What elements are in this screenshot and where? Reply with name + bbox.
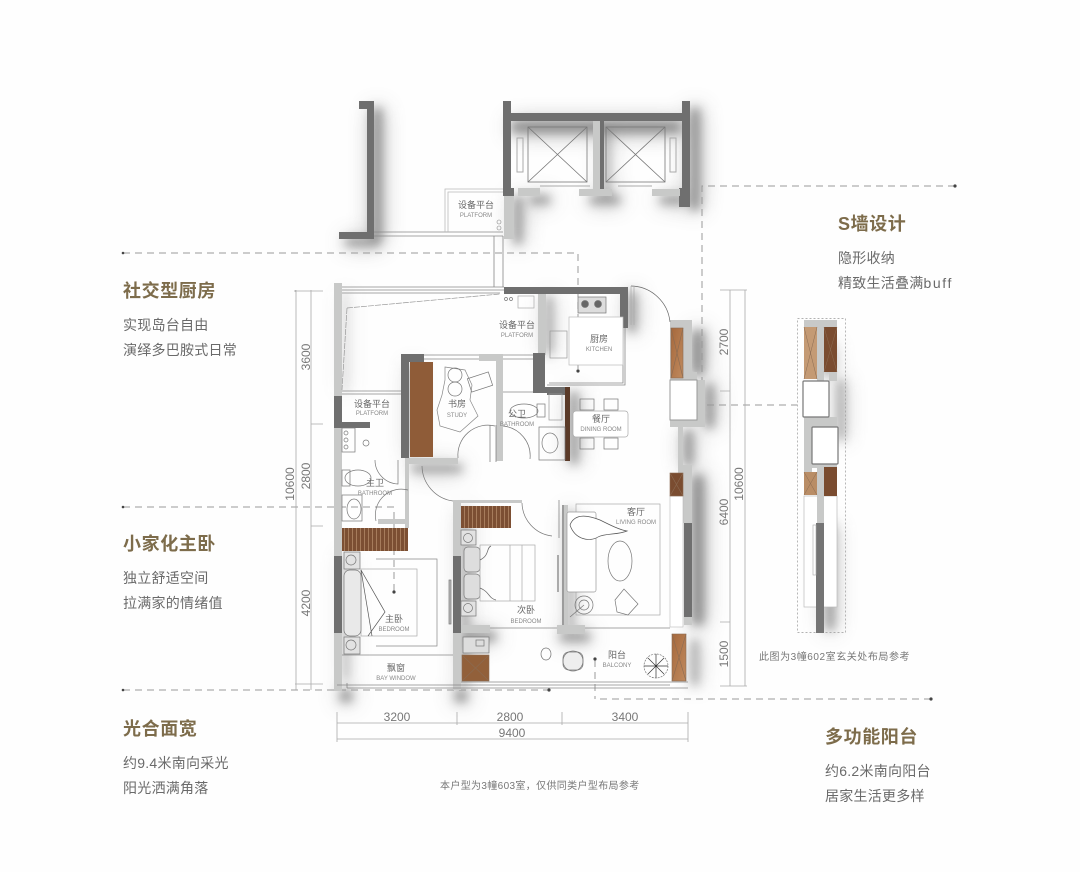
- wall drop shadows: [340, 108, 844, 702]
- callout: multifunction balcony: [825, 727, 931, 804]
- callout: master bedroom: 小家化主卧: [123, 534, 216, 554]
- kitchen door arc: [631, 286, 670, 322]
- room labels: 主卧: [385, 613, 403, 624]
- room labels: STUDY: [447, 413, 467, 419]
- room labels: 设备平台: [354, 398, 390, 409]
- dimension numbers: 10600: [732, 467, 746, 501]
- callout: social kitchen: 社交型厨房: [123, 281, 216, 301]
- callout: multifunction balcony: 约6.2米南向阳台: [825, 763, 931, 779]
- room labels: 客厅: [627, 506, 645, 517]
- dimension numbers: 1500: [717, 640, 731, 667]
- dimension numbers: 10600: [283, 467, 297, 501]
- room labels: 设备平台: [499, 319, 535, 330]
- door arcs: [375, 425, 559, 538]
- room labels: BEDROOM: [378, 627, 410, 633]
- study chair and desk: [437, 367, 493, 432]
- room labels: KITCHEN: [586, 347, 612, 353]
- room labels: BATHROOM: [500, 422, 534, 428]
- top core: walls and elevators: PLATFORM: [460, 213, 492, 219]
- callout: multifunction balcony: 多功能阳台: [825, 727, 918, 747]
- bottom dimensions: [337, 712, 688, 742]
- room labels: 主卫: [366, 477, 384, 488]
- room labels: BATHROOM: [358, 491, 392, 497]
- living room furniture: [558, 504, 660, 617]
- callout: social kitchen: [123, 281, 237, 358]
- room labels: BEDROOM: [510, 619, 542, 625]
- callout: social kitchen: 实现岛台自由: [123, 317, 208, 333]
- S wall detail: [798, 318, 846, 633]
- balcony furniture: [463, 637, 668, 678]
- wardrobes: [342, 362, 511, 551]
- dimension numbers: 2700: [717, 328, 731, 355]
- second bedroom furniture: [461, 530, 535, 616]
- callout: social kitchen: 演绎多巴胺式日常: [123, 342, 237, 358]
- kitchen fixtures: [504, 296, 623, 365]
- room labels: BALCONY: [603, 663, 631, 669]
- callout: S wall design: 精致生活叠满buff: [838, 275, 953, 291]
- room labels: 公卫: [508, 409, 526, 419]
- callout: south frontage: 光合面宽: [123, 719, 197, 739]
- room labels: DINING ROOM: [580, 427, 622, 433]
- glazing lines: [337, 287, 688, 688]
- dimension numbers: 4200: [299, 589, 313, 616]
- top core: walls and elevators: [339, 101, 690, 287]
- note: S wall reference: 此图为3幢602室玄关处布局参考: [759, 652, 910, 663]
- dining table: [573, 399, 628, 449]
- room labels: 阳台: [608, 649, 626, 660]
- room labels: [354, 319, 656, 682]
- room labels: PLATFORM: [356, 411, 388, 417]
- room labels: 厨房: [590, 333, 608, 344]
- room labels: PLATFORM: [501, 333, 533, 339]
- callout: master bedroom: [123, 534, 223, 611]
- note: unit reference: 本户型为3幢603室，仅供同类户型布局参考: [440, 781, 640, 792]
- master bedroom furniture: [344, 552, 451, 654]
- dimension numbers: 3200: [384, 710, 411, 724]
- callout: S wall design: [838, 214, 953, 291]
- furniture linework: [342, 286, 670, 678]
- callout: south frontage: 约9.4米南向采光: [123, 755, 229, 771]
- room labels: BAY WINDOW: [376, 676, 416, 682]
- callout: south frontage: 阳光洒满角落: [123, 780, 208, 796]
- room labels: 飘窗: [387, 662, 405, 673]
- callout: master bedroom: 独立舒适空间: [123, 570, 208, 586]
- callout: south frontage: [123, 719, 229, 796]
- dimension numbers: 2800: [497, 710, 524, 724]
- callout: master bedroom: 拉满家的情绪值: [123, 595, 223, 611]
- room labels: 餐厅: [592, 413, 610, 424]
- room labels: 次卧: [517, 604, 535, 615]
- room labels: 书房: [448, 398, 466, 409]
- main floor plan: [334, 283, 705, 691]
- storage panels with cross: [462, 328, 686, 681]
- dimension numbers: [283, 328, 746, 740]
- callout: S wall design: S墙设计: [838, 214, 906, 234]
- callout leader lines: [123, 186, 955, 699]
- callout: S wall design: 隐形收纳: [838, 250, 895, 266]
- top core: walls and elevators: 设备平台: [458, 199, 494, 210]
- dimension numbers: 3600: [299, 343, 313, 370]
- dimension numbers: 9400: [499, 726, 526, 740]
- dimension numbers: 6400: [717, 498, 731, 525]
- right dimensions: [720, 290, 747, 686]
- callout: multifunction balcony: 居家生活更多样: [825, 788, 925, 804]
- bathroom fixtures: [342, 394, 565, 521]
- left dimensions: [295, 290, 323, 690]
- dimension numbers: 2800: [299, 462, 313, 489]
- dimension numbers: 3400: [612, 710, 639, 724]
- exterior and structural walls: [334, 283, 705, 691]
- room labels: LIVING ROOM: [616, 520, 656, 526]
